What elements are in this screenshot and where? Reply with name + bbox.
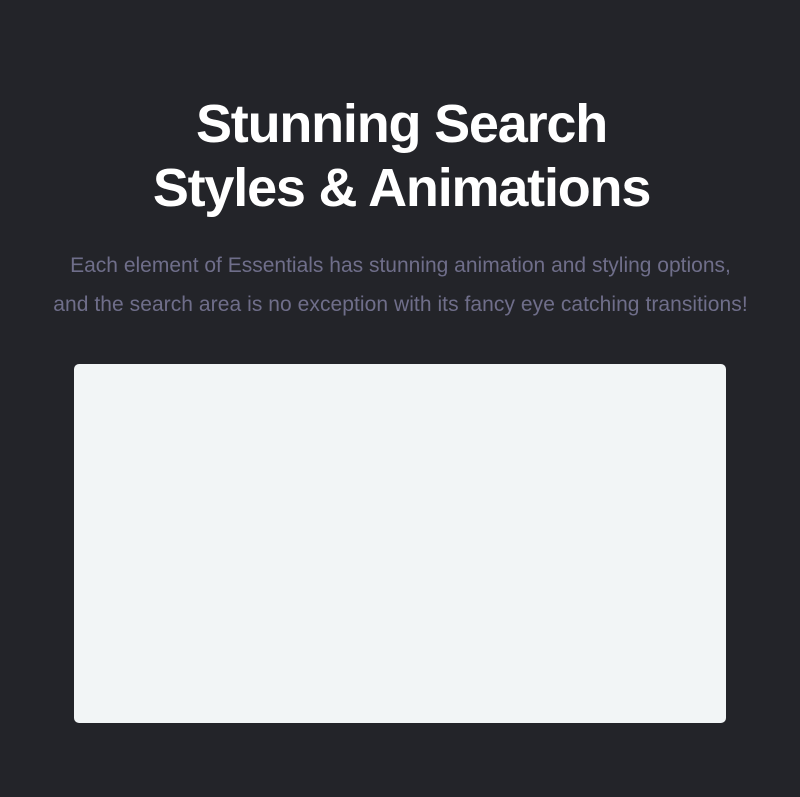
title: Styles & Animations [153,158,650,218]
subtitle text: and the search area is no exception with its fancy eye catching transitions! [53,293,748,316]
title [153,94,650,218]
panel: search preview card [74,364,726,723]
subtitle text [53,254,748,316]
subtitle text: Each element of Essentials has stunning animation and styling options, [70,254,731,277]
title: Stunning Search [196,94,607,154]
